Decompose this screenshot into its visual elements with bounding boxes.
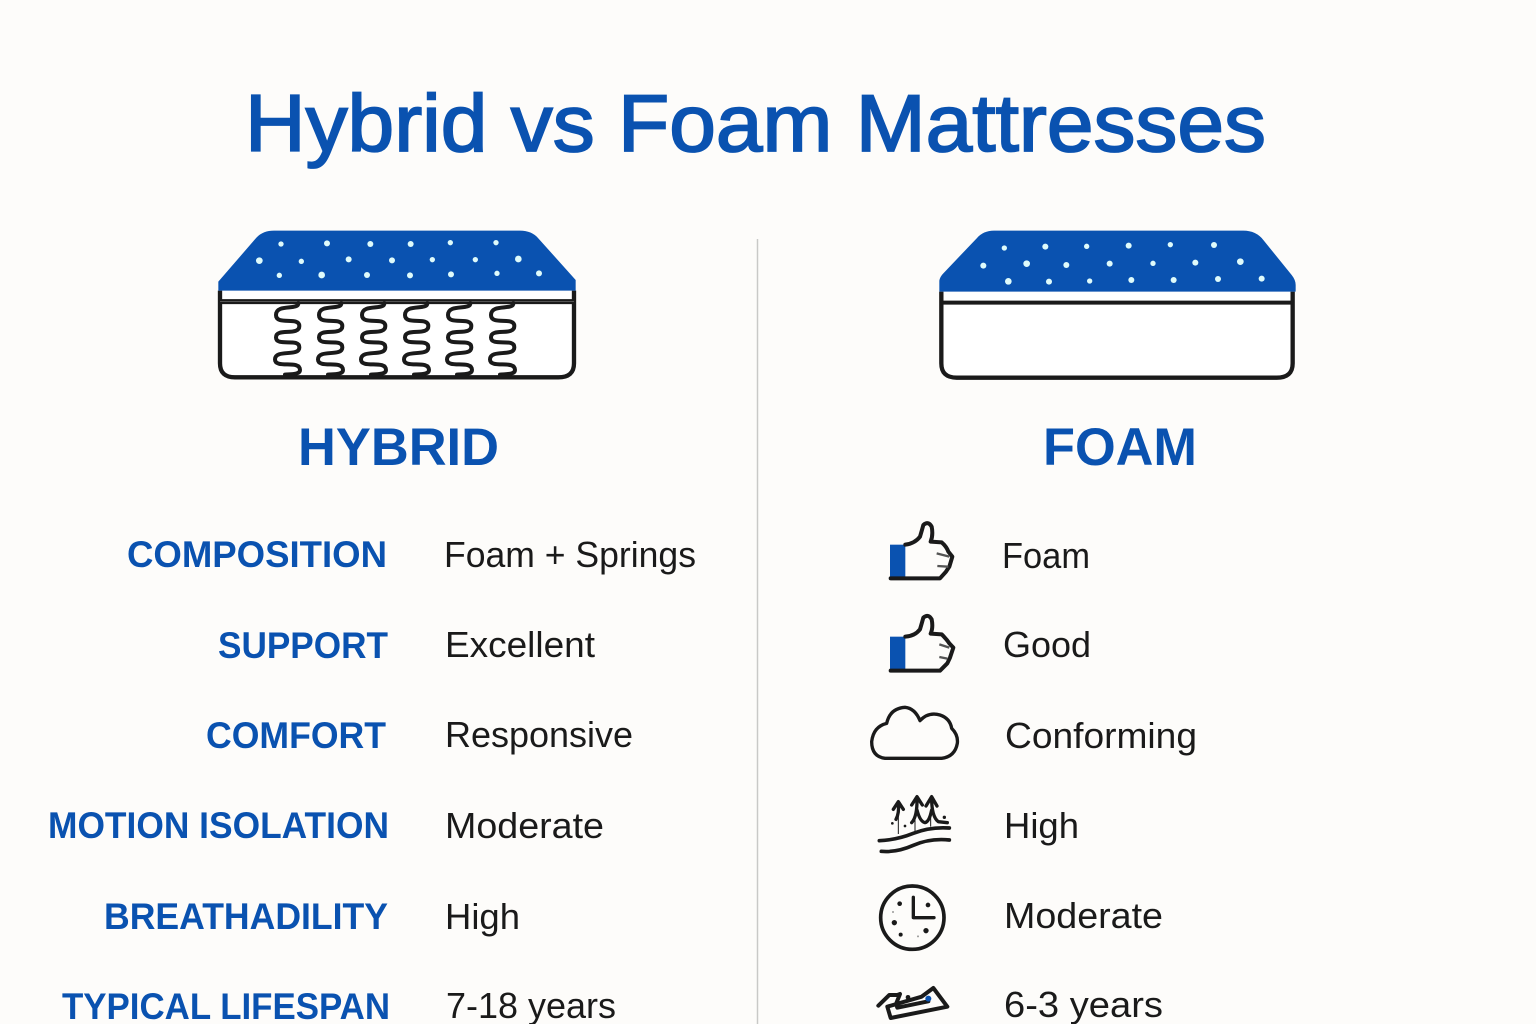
row: composition: COMPOSITION — [127, 534, 387, 575]
row: motion isolation: MOTION ISOLATION — [48, 805, 389, 846]
icon: foam mattress — [939, 231, 1296, 378]
row: breathability: High — [445, 896, 520, 937]
row: comfort — [206, 714, 633, 756]
row: foam composition: Foam — [1002, 535, 1090, 576]
heading: foam: FOAM — [1043, 418, 1197, 477]
heading: hybrid: HYBRID — [298, 418, 499, 477]
row: comfort: COMFORT — [206, 715, 386, 756]
row: support: Excellent — [445, 624, 595, 665]
row: typical lifespan — [62, 985, 616, 1024]
icon: arrows over waves — [879, 797, 949, 852]
row: foam breathability — [881, 886, 1163, 949]
panel: hybrid column — [48, 231, 696, 1024]
row: motion isolation — [48, 805, 604, 846]
row: foam lifespan: 6-3 years — [1004, 984, 1163, 1024]
row: foam composition — [890, 523, 1090, 578]
icon: clock — [881, 886, 944, 949]
row: foam support — [890, 616, 1091, 671]
row: foam lifespan — [878, 984, 1163, 1024]
row: composition: Foam + Springs — [444, 534, 696, 575]
row: composition — [127, 534, 696, 575]
icon: thumbs up — [890, 616, 953, 671]
icon: bed outline — [878, 988, 947, 1018]
row: breathability: BREATHADILITY — [104, 896, 388, 937]
row: support: SUPPORT — [218, 625, 388, 666]
icon: hybrid mattress with springs — [218, 231, 576, 377]
row: foam comfort: Conforming — [1005, 715, 1197, 756]
title: Hybrid vs Foam Mattresses — [245, 79, 1266, 169]
row: foam support: Good — [1003, 624, 1091, 665]
row: motion isolation: Moderate — [445, 805, 604, 846]
icon: thumbs up — [890, 523, 952, 578]
row: support — [218, 624, 595, 666]
icon: cloud — [872, 707, 957, 758]
row: foam breathability: Moderate — [1004, 895, 1163, 936]
row: foam motion isolation: High — [1004, 805, 1079, 846]
center divider — [756, 239, 758, 1024]
panel: foam column — [872, 231, 1296, 1024]
row: foam comfort — [872, 707, 1197, 758]
row: foam motion isolation — [879, 797, 1079, 852]
row: comfort: Responsive — [445, 714, 633, 755]
